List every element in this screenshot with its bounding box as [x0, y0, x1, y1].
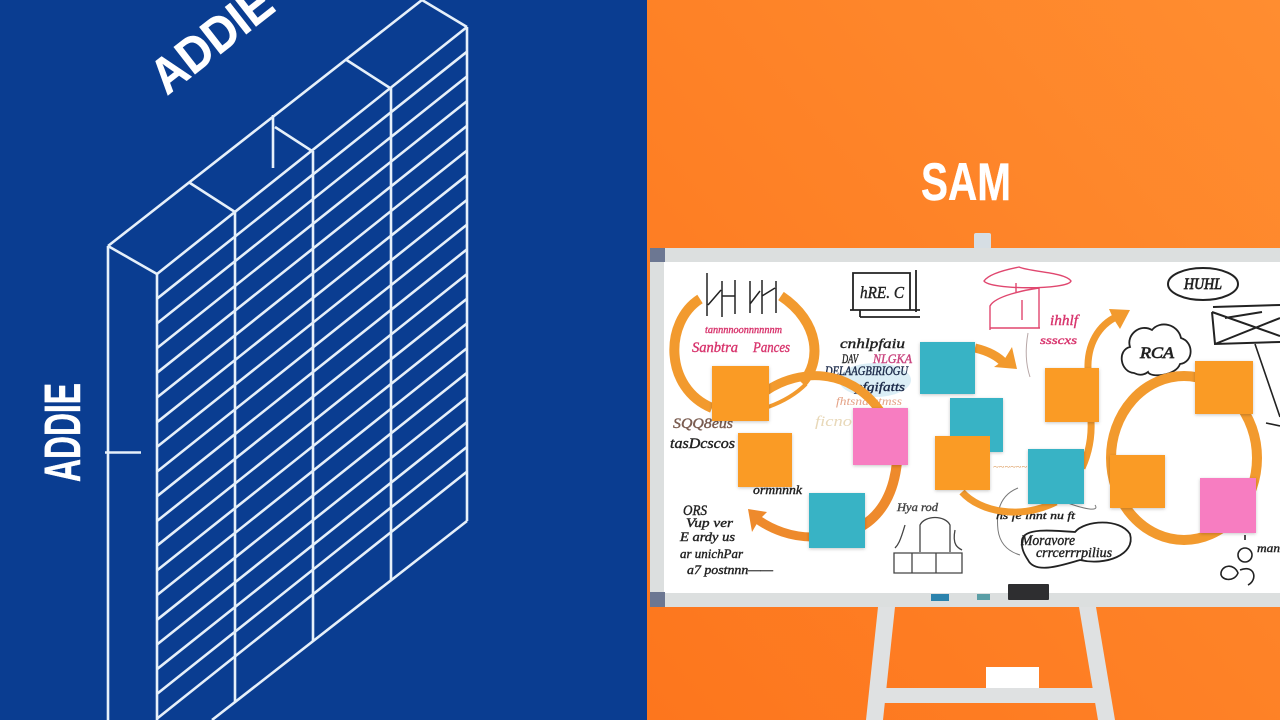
loop 1 left arc: [674, 299, 712, 408]
frame corners: [650, 248, 665, 262]
handwriting: over teal note: hs fe lhnt nu ft: [996, 510, 1076, 522]
sticky: orange 6: [1110, 455, 1165, 508]
sticky notes: [712, 342, 1256, 548]
sticky: orange 5: [1195, 361, 1253, 414]
handwriting: oval note line 2: crrcerrrpilius: [1036, 546, 1113, 561]
bottom swoop under teal note: [962, 492, 1056, 512]
diagram: ADDIE isometric wireframe block: [105, 0, 467, 720]
mushroom top: [984, 267, 1071, 288]
handwriting: right edge word: man: [1257, 541, 1280, 555]
handwriting: building caption: Hya rod: [896, 500, 939, 514]
horizontal hatch rows: [157, 27, 467, 720]
handwriting: centre block 4: pfgifatts: [854, 379, 905, 394]
speech oval: [1168, 268, 1238, 300]
sketches: pink marker drawing: [984, 267, 1071, 377]
handwriting: centre block 2: DAV: [841, 351, 859, 366]
building sketch: [894, 518, 962, 573]
connector lower branch: [768, 384, 806, 407]
loop 1 right arc: [781, 296, 814, 383]
arrowhead: left pointing: [748, 509, 767, 532]
mushroom body: [990, 283, 1040, 330]
arrowhead: up right: [1109, 309, 1130, 329]
handwriting: bottom-left line 5: a7 postnnn——: [687, 562, 773, 577]
arrowheads: [748, 309, 1130, 532]
label: vertical ADDIE: ADDIE: [34, 383, 91, 482]
tick mark: upper: [272, 115, 274, 168]
eraser on tray: [1008, 584, 1049, 600]
handwriting: labels on whiteboard: [670, 276, 1280, 577]
sticky: teal 2: [950, 398, 1003, 452]
sticky: pink 2: [1200, 478, 1256, 533]
arrow shaft: teal to left: [757, 519, 812, 537]
arrowhead: right pointing: [994, 347, 1017, 369]
arrow shaft: teal to right: [975, 348, 1005, 364]
arrow shaft: orange note upward: [1088, 316, 1118, 370]
panel: SAM orange background: [647, 0, 1280, 720]
handwriting: oval note line 1: Moravore: [1020, 533, 1075, 549]
handwriting: pale word: ficno: [815, 414, 853, 430]
handwriting: under orange note: ormnnnk: [753, 482, 802, 497]
sticky: teal 3: [1028, 449, 1084, 504]
big right circle: [1111, 376, 1257, 540]
handwriting: framed sketch caption: hRE. C: [860, 283, 905, 302]
handwriting: pink caption: ihhlf: [1050, 313, 1080, 329]
handwriting: pink line over tally: tannnnoonnnnnnm: [705, 324, 782, 336]
handwriting: inside speech oval: HUHL: [1183, 276, 1222, 293]
handwriting: pink right word: Pances: [752, 340, 790, 356]
pink note to teal note: [862, 462, 897, 526]
sticky: orange 2: [738, 433, 792, 487]
connector to pink note, upper: [766, 376, 880, 411]
flow arcs: orange loops and arrows: [674, 296, 1257, 540]
handwriting: pink left word: Sanbtra: [692, 340, 738, 356]
heading: SAM: SAM: [921, 153, 1011, 212]
panel: ADDIE blue background: [0, 0, 647, 720]
envelope leg lines: [1255, 344, 1280, 426]
sketches: black marker boxes and shapes: [707, 268, 1280, 585]
sticky: orange 4: [1045, 368, 1099, 422]
envelope: [1212, 305, 1280, 344]
handwriting: bottom-left line 2: Vup ver: [686, 515, 734, 530]
handwriting: centre block pink: NLGKA: [872, 351, 912, 366]
frame: [650, 248, 1280, 607]
crossbar: [884, 688, 1097, 703]
sticky: teal 1: [920, 342, 975, 394]
orange note to teal: [1082, 420, 1091, 468]
vertical column lines: [108, 27, 467, 720]
handwriting: bottom-left line 4: ar unichPar: [680, 546, 744, 561]
tick mark: lower: [105, 451, 141, 454]
handwriting: centre block 3: DELAAGBIRIOGU: [824, 363, 909, 378]
oval note outline: [1022, 522, 1131, 568]
handwriting: faded orange line: fhtsnd ctmss: [836, 394, 902, 408]
framed sketch box: [850, 270, 920, 317]
sticky: teal 4: [809, 493, 865, 548]
tally marks: [707, 273, 776, 317]
note: light blue blot behind text: [839, 363, 911, 397]
marker on tray: blue: [931, 594, 949, 601]
handwriting: pink small: ssscxs: [1040, 333, 1077, 347]
handwriting: orange scribble: ~~~~~~: [993, 462, 1027, 472]
writing surface: [664, 262, 1280, 593]
handwriting: left scribble 1: SQQ8eus: [673, 416, 733, 432]
peg: top of whiteboard: [974, 233, 991, 249]
easel stand: [866, 607, 1115, 720]
left leg: [866, 607, 895, 720]
marker on tray: teal: [977, 594, 990, 600]
handwriting: centre block 1: cnhlpfaiu: [840, 337, 905, 352]
handwriting: left scribble 2: tasDcscos: [670, 436, 735, 452]
cloud: [1122, 324, 1191, 375]
box on crossbar: [986, 667, 1039, 689]
right leg: [1079, 607, 1115, 720]
sticky: orange 3: [935, 436, 990, 490]
sticky: pink 1: [853, 408, 908, 465]
handwriting: bottom-left line 3: E ardy us: [679, 529, 735, 544]
whiteboard frame and surface: [650, 248, 1280, 607]
sticky: orange 1: [712, 366, 769, 421]
wide grey loop: [998, 488, 1096, 555]
people icon: [1221, 535, 1254, 585]
handwriting: bottom-left line 1: ORS: [683, 503, 707, 519]
handwriting: inside cloud: RCA: [1139, 345, 1174, 362]
grey pointer line: [1026, 333, 1030, 377]
top face outline and dividers: [108, 0, 467, 274]
